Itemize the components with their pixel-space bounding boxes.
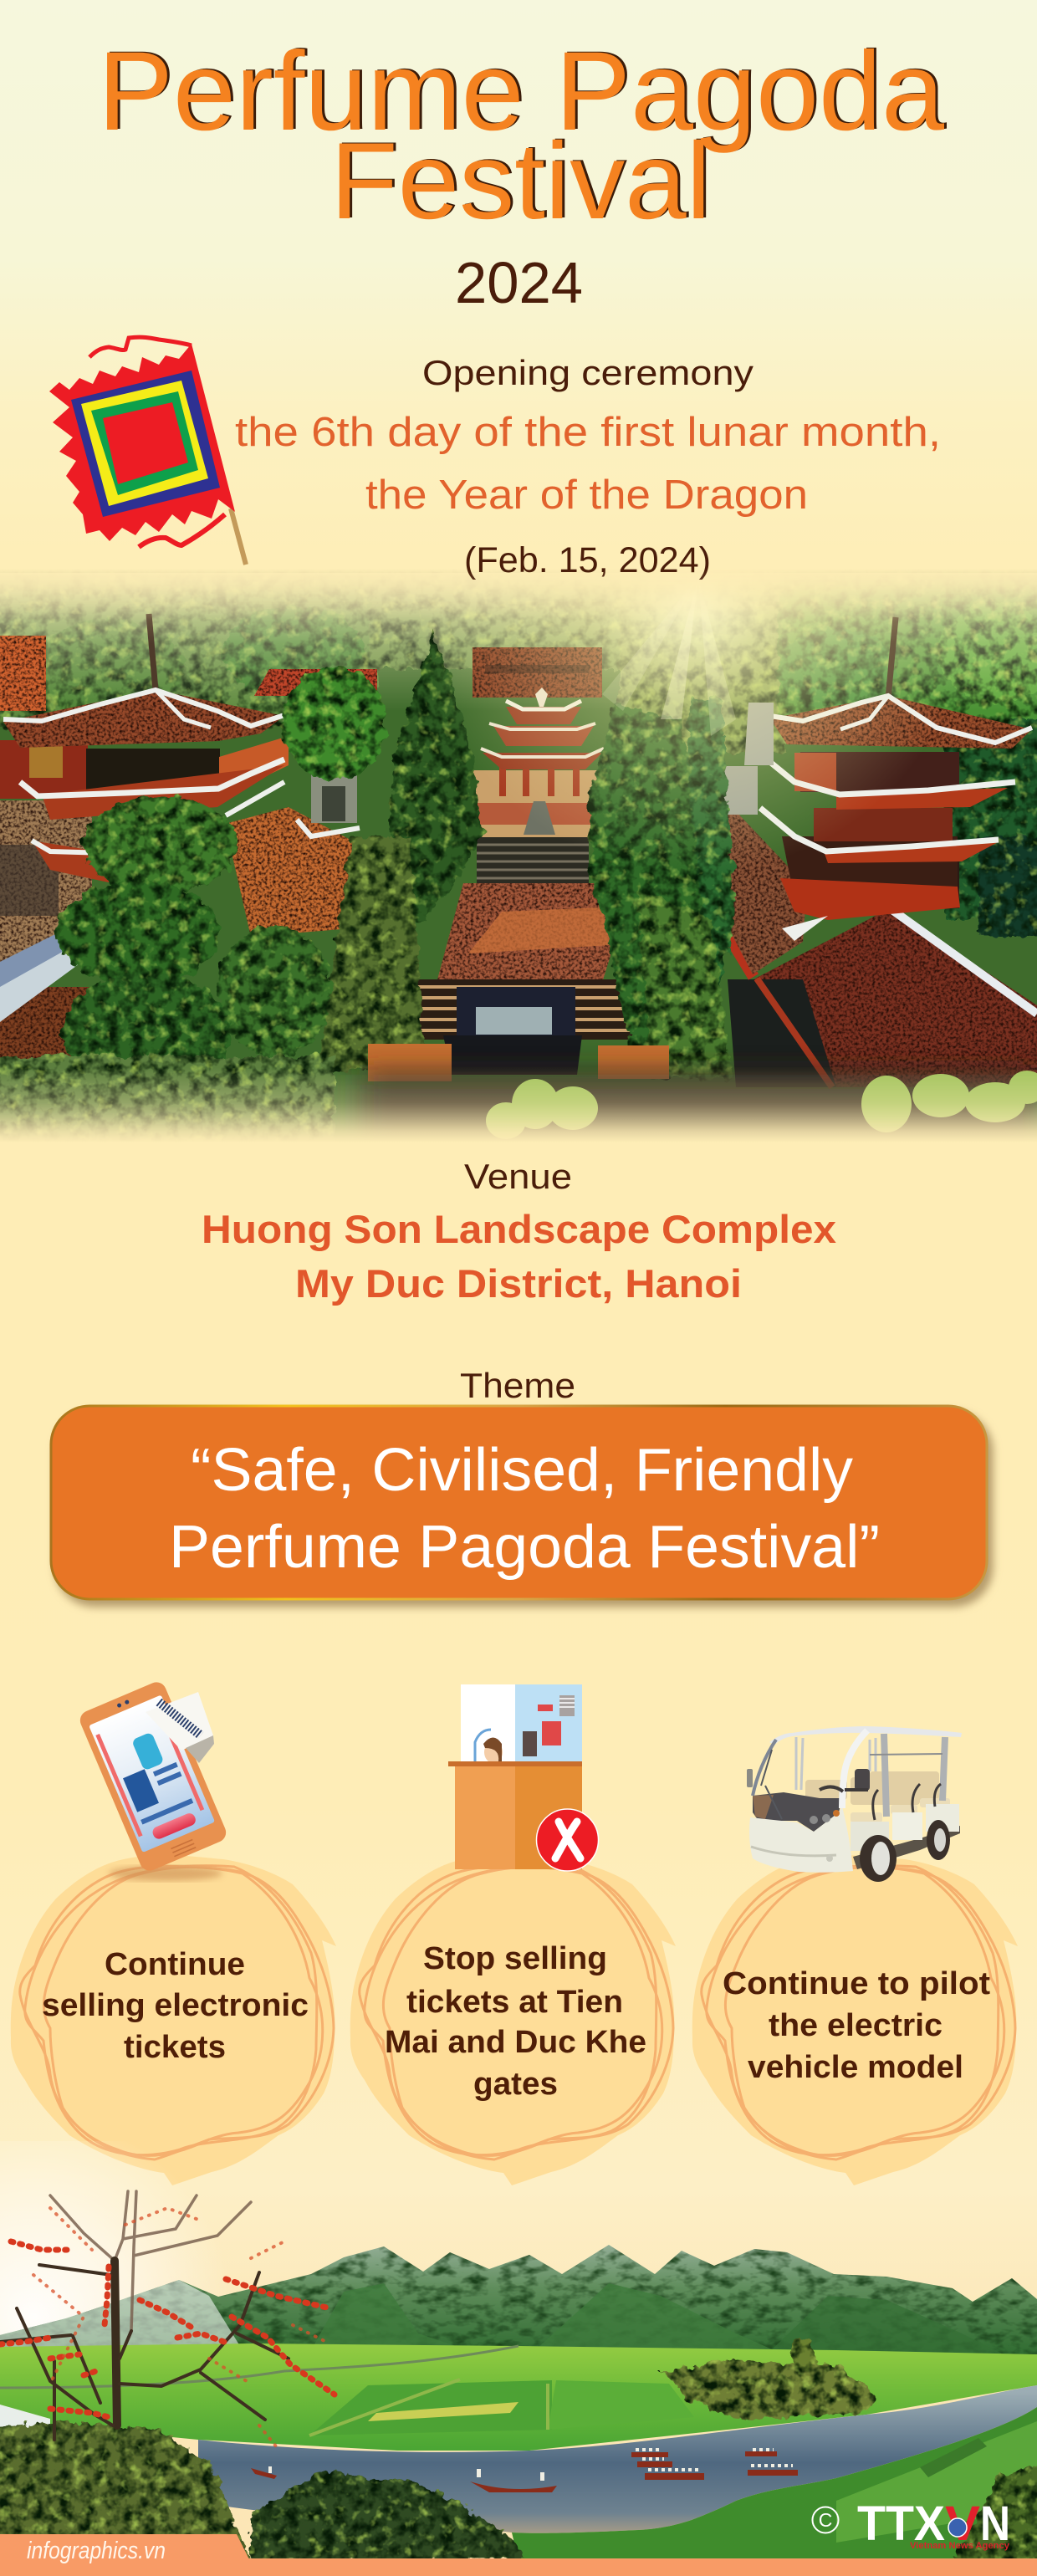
circle 2: stop selling at gates: gates xyxy=(473,2067,558,2102)
circle 2: stop selling at gates: Mai and Duc Khe xyxy=(385,2025,646,2060)
circle 2: stop selling at gates: Stop selling xyxy=(423,1941,607,1976)
river xyxy=(198,2385,1037,2533)
big right roof xyxy=(753,908,1037,1087)
title xyxy=(98,29,944,242)
year: 2024 xyxy=(455,250,583,315)
footer tab xyxy=(0,2534,250,2561)
icon: festival flag xyxy=(49,337,246,565)
roof and pillars xyxy=(769,1726,962,1745)
title: Perfume Pagoda xyxy=(98,29,944,154)
top haze xyxy=(0,573,1037,711)
stone towers xyxy=(311,774,357,823)
circle 1: electronic tickets: Continue xyxy=(105,1947,245,1982)
circle 3: electric vehicle pilot: the electric xyxy=(769,2008,942,2043)
circle 1: electronic tickets xyxy=(11,1855,336,2185)
cab hood xyxy=(753,1792,842,1832)
circle 3: electric vehicle pilot: vehicle model xyxy=(748,2050,963,2085)
circle 2: stop selling at gates xyxy=(350,1855,676,2185)
trees xyxy=(0,631,736,1147)
panel: theme slogan xyxy=(51,1406,987,1599)
venue block: Huong Son Landscape Complex xyxy=(202,1207,836,1251)
logo: TTXVN Vietnam News Agency: C xyxy=(819,2509,832,2531)
side panels xyxy=(926,1804,959,1832)
icon: ticket booth with red cross xyxy=(448,1684,599,1871)
circle 3: electric vehicle pilot: Continue to pilot xyxy=(723,1966,990,2001)
foreground bushes xyxy=(0,2421,1037,2561)
logo: TTXVN Vietnam News Agency: V xyxy=(945,2497,980,2551)
venue block xyxy=(202,1157,836,1306)
soft shaded ground below the gate xyxy=(360,1075,1037,1158)
circle 1: electronic tickets: tickets xyxy=(124,2030,226,2065)
opening ceremony text: the Year of the Dragon xyxy=(365,473,808,518)
right pagoda xyxy=(760,617,1032,941)
bare tree with red flowers xyxy=(0,2191,335,2446)
front body xyxy=(749,1807,853,1873)
panel: theme slogan: “Safe, Civilised, Friendly xyxy=(191,1437,853,1504)
upper stairs xyxy=(477,837,589,883)
theme heading: Theme xyxy=(460,1366,575,1405)
left pagoda xyxy=(0,614,360,882)
foreground leaves xyxy=(486,1071,1037,1139)
forest backdrop xyxy=(0,569,1037,937)
panel: theme slogan: Perfume Pagoda Festival” xyxy=(169,1514,880,1581)
logo: TTXVN Vietnam News Agency: Vietnam News Agency xyxy=(910,2541,1010,2551)
lower gate xyxy=(457,987,575,1037)
footer bar xyxy=(0,2558,1037,2576)
wheels xyxy=(927,1820,950,1860)
lower stairs xyxy=(418,979,632,1040)
rear seats xyxy=(805,1771,939,1805)
sun glow xyxy=(438,580,942,860)
venue block: Venue xyxy=(464,1157,572,1196)
tree island xyxy=(662,2338,880,2419)
opening ceremony text: Opening ceremony xyxy=(422,353,753,392)
white glow behind tree xyxy=(0,2141,251,2425)
logo: TTXVN Vietnam News Agency xyxy=(813,2497,1010,2551)
circle 2: stop selling at gates: tickets at Tien xyxy=(406,1985,623,2020)
icon: electric vehicle xyxy=(747,1726,962,1882)
chassis xyxy=(853,1826,960,1869)
courtyard and central pavilion xyxy=(473,770,597,837)
opening ceremony text: (Feb. 15, 2024) xyxy=(464,540,711,580)
south bank field xyxy=(512,2407,1037,2561)
icon: phone with e-ticket xyxy=(77,1679,229,1881)
circle 1: electronic tickets: selling electronic xyxy=(42,1988,309,2023)
boats xyxy=(251,2451,798,2492)
title: Festival xyxy=(330,120,711,242)
venue block: My Duc District, Hanoi xyxy=(295,1261,742,1306)
rice fields xyxy=(0,2343,1037,2451)
mountains xyxy=(0,2245,1037,2355)
footer label: infographics.vn xyxy=(27,2538,166,2564)
logo: TTXVN Vietnam News Agency: TTX xyxy=(857,2497,945,2551)
photo: Perfume Pagoda aerial view xyxy=(0,569,1037,1158)
logo: TTXVN Vietnam News Agency: N xyxy=(980,2497,1010,2551)
opening ceremony text: the 6th day of the first lunar month, xyxy=(235,410,941,455)
circle 3: electric vehicle pilot xyxy=(692,1855,1018,2185)
left buildings xyxy=(0,636,602,1062)
photo: Huong Son landscape with river xyxy=(0,2141,1037,2576)
opening ceremony text xyxy=(235,353,941,580)
